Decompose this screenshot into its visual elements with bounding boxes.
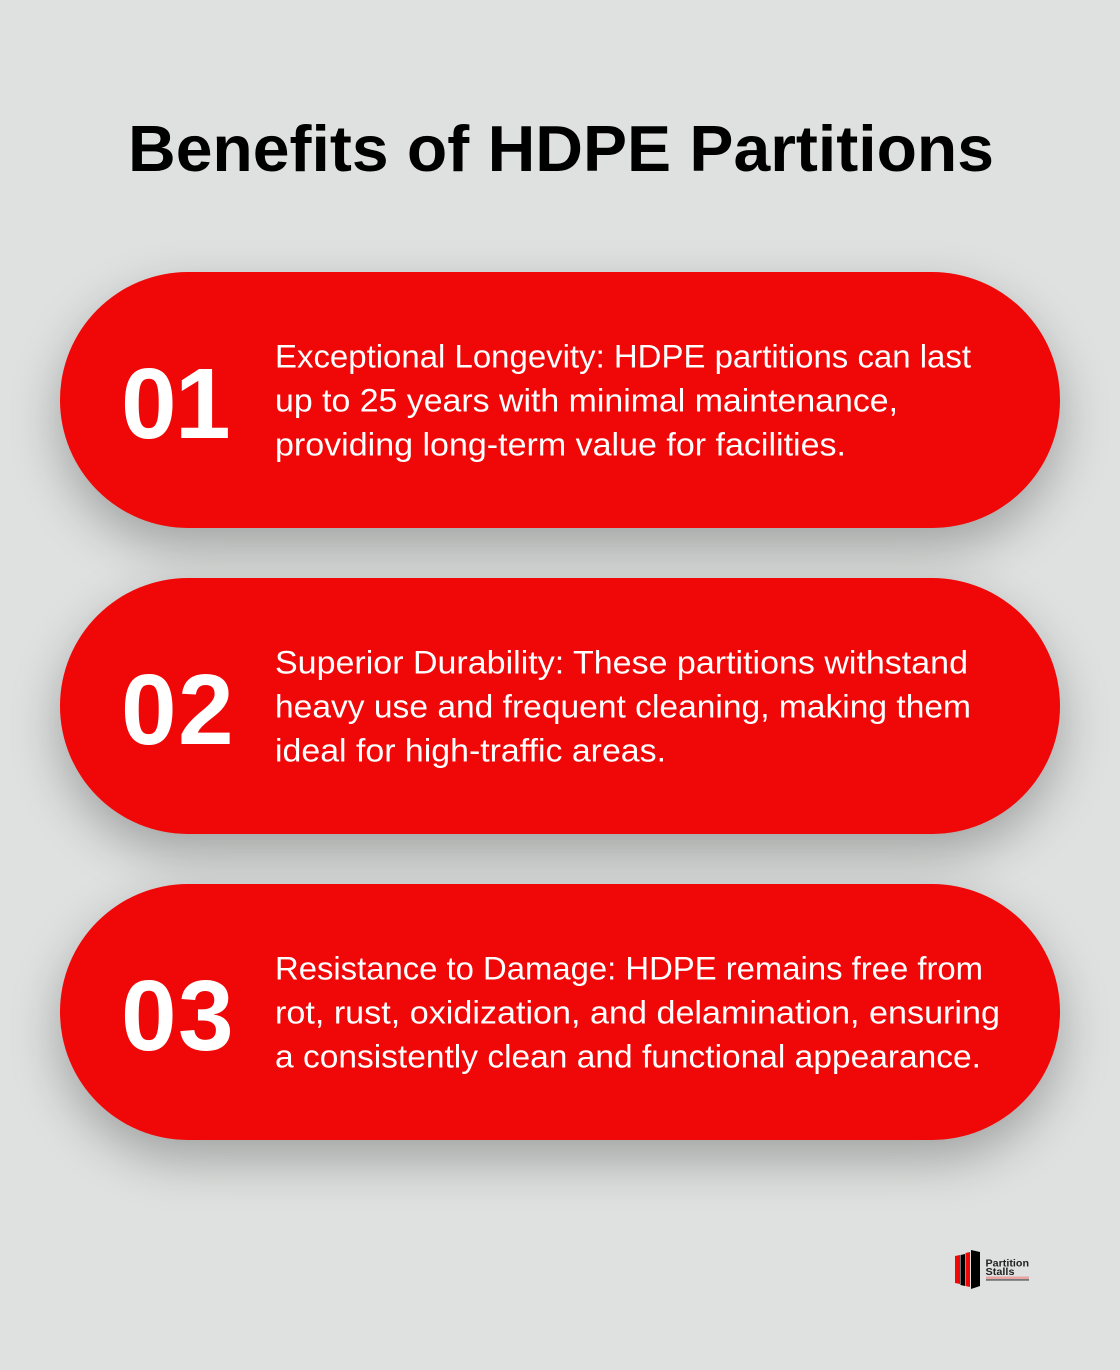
benefit 1 text: providing long-term value for facilities. — [275, 426, 846, 462]
benefit 1 content — [121, 338, 971, 462]
panel: benefit 3 background — [60, 884, 1060, 1140]
panel: benefit 2 background — [60, 578, 1060, 834]
benefit 3 text: Resistance to Damage: HDPE remains free from — [275, 950, 983, 986]
benefit 1 text: up to 25 years with minimal maintenance, — [275, 382, 898, 418]
benefit 1 text — [275, 338, 971, 462]
number 03: 03 — [121, 960, 234, 1072]
benefit 2 text: heavy use and frequent cleaning, making them — [275, 688, 971, 724]
benefit 3 text: rot, rust, oxidization, and delamination, ensuring — [275, 994, 1000, 1030]
logo wordmark: Partition — [986, 1258, 1029, 1270]
benefit 2 text: Superior Durability: These partitions withstand — [275, 644, 968, 680]
number 01: 01 — [121, 348, 231, 460]
benefit 3 content — [121, 950, 1000, 1074]
benefit 3 text: a consistently clean and functional appearance. — [275, 1038, 981, 1074]
benefit 2 content — [121, 644, 971, 768]
logo wordmark — [986, 1258, 1029, 1281]
logo: Partition Stalls — [955, 1250, 1029, 1289]
benefit 1 text: Exceptional Longevity: HDPE partitions can last — [275, 338, 971, 374]
number 02: 02 — [121, 654, 234, 766]
title: Benefits of HDPE Partitions — [128, 112, 994, 185]
benefit 3 text — [275, 950, 1000, 1074]
panel: benefit 1 background — [60, 272, 1060, 528]
benefit 2 text: ideal for high-traffic areas. — [275, 732, 666, 768]
benefit 2 text — [275, 644, 971, 768]
icon: partition panels — [955, 1250, 980, 1289]
logo wordmark: Stalls — [986, 1267, 1015, 1278]
